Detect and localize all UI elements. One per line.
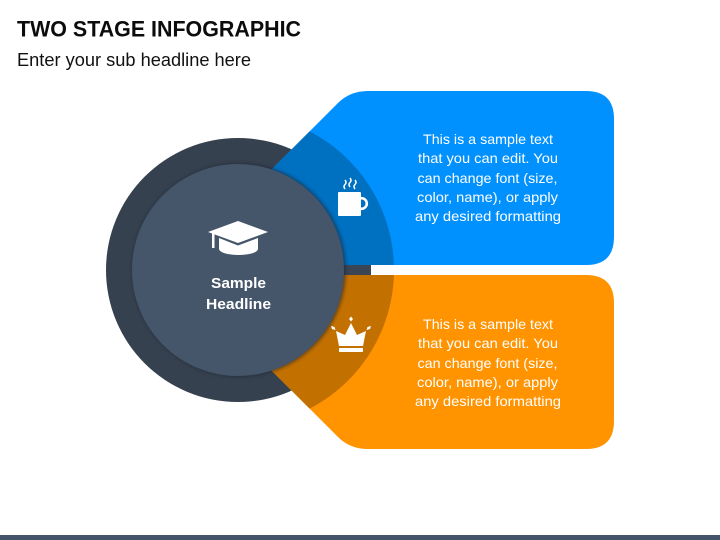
- icon: crown: [331, 316, 371, 352]
- panel: blue stage: [272, 91, 614, 265]
- blue body text: can change font (size,: [418, 170, 558, 186]
- icon: graduation cap: [208, 221, 268, 255]
- panel: orange stage: [272, 275, 614, 449]
- blue body text: This is a sample text: [423, 131, 553, 147]
- center headline: [206, 275, 271, 313]
- outer dark circle: [106, 138, 371, 402]
- orange callout shape: [238, 275, 614, 449]
- blue body text: color, name), or apply: [417, 189, 558, 205]
- blue body text: any desired formatting: [415, 208, 561, 224]
- orange body text: color, name), or apply: [417, 374, 558, 390]
- blue darker ring segment: [272, 132, 394, 265]
- orange darker ring segment: [272, 275, 394, 408]
- blue callout shape: [238, 91, 614, 265]
- blue body text: that you can edit. You: [418, 150, 558, 166]
- orange body text: that you can edit. You: [418, 335, 558, 351]
- subtitle: Enter your sub headline here: [17, 50, 251, 70]
- blue body text: [415, 131, 561, 224]
- orange body text: any desired formatting: [415, 393, 561, 409]
- inner circle: [132, 163, 346, 377]
- orange body text: This is a sample text: [423, 316, 553, 332]
- footer bar: [0, 535, 720, 540]
- orange body text: can change font (size,: [418, 355, 558, 371]
- center headline: Sample: [211, 275, 266, 292]
- orange body text: [415, 316, 561, 409]
- center headline: Headline: [206, 296, 271, 313]
- icon: coffee mug: [338, 178, 367, 216]
- title: TWO STAGE INFOGRAPHIC: [17, 16, 301, 42]
